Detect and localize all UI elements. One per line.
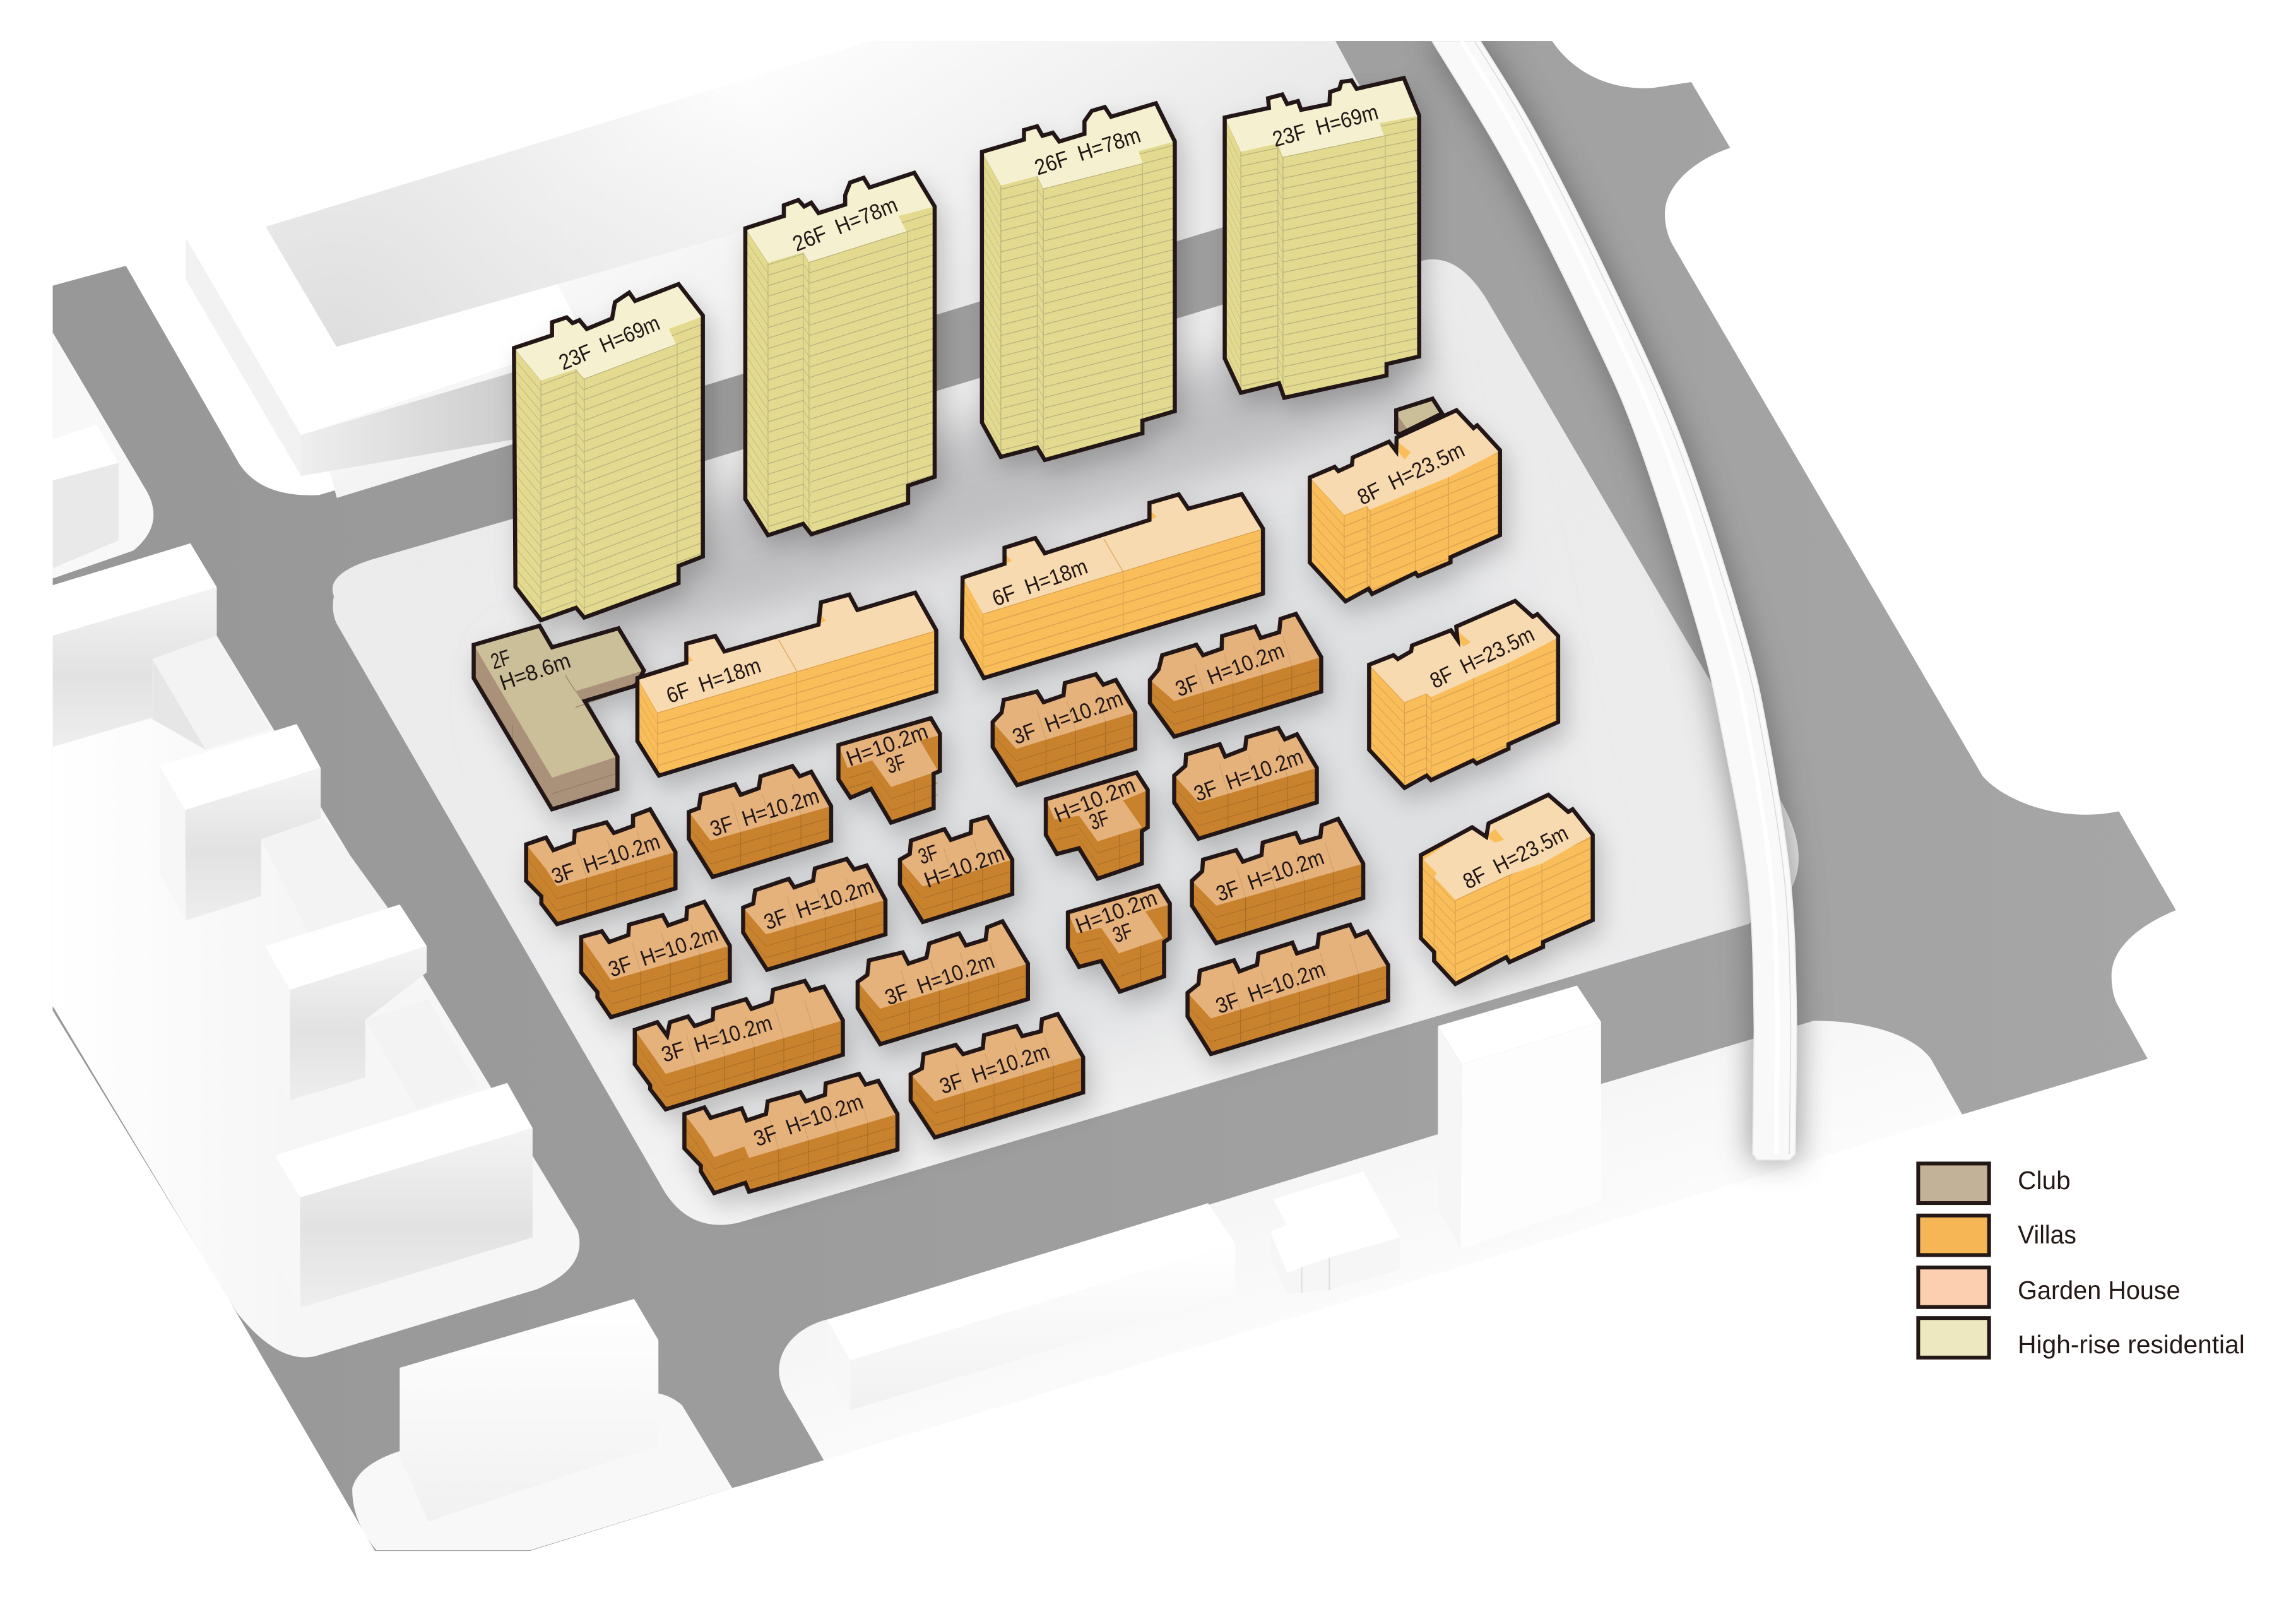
villa 1: 3F H=10.2m [548, 829, 663, 889]
building: garden house 8F north: 8F H=23.5m [1354, 437, 1469, 510]
building: high-rise tower 2 [745, 173, 935, 535]
tall building [1438, 986, 1601, 1249]
building: garden house 6F A: 6F H=18m [663, 653, 764, 708]
building: high-rise tower 3: 26F H=78m [1031, 123, 1144, 180]
villa 6: H=10.2m [921, 841, 1008, 892]
villa 17: T-shaped: H=10.2m [1072, 886, 1161, 939]
villa 3: T-shaped: 3F [883, 749, 909, 779]
villa 2: 3F H=10.2m [707, 783, 822, 841]
building: high-rise tower 1 [514, 284, 703, 620]
building: garden house 8F north [1310, 410, 1500, 602]
legend item: villas [1918, 1216, 2076, 1255]
villa 14: T-shaped: H=10.2m [1051, 773, 1139, 827]
villa 17: T-shaped [1068, 886, 1170, 992]
villa 5: 3F H=10.2m [760, 874, 877, 935]
plot: right-side and bottom white land [530, 0, 2296, 1607]
building: high-rise tower 1: 23F H=69m [555, 311, 663, 375]
villa 9: 3F H=10.2m [937, 1039, 1053, 1099]
building: garden house 8F south: 8F H=23.5m [1459, 821, 1572, 894]
villa 2 [689, 766, 831, 877]
legend item: garden house: Garden House [2018, 1276, 2181, 1305]
plot: bottom-left block [352, 1299, 732, 1550]
legend item: high-rise residential [1918, 1318, 2245, 1359]
villa 6 [900, 817, 1012, 922]
building: high-rise tower 4 [1225, 78, 1419, 398]
white block 4 [275, 1083, 533, 1308]
villa 10 [858, 922, 1028, 1044]
villa 5 [743, 859, 885, 970]
buildings [474, 78, 1593, 1193]
villa 18 [1188, 925, 1388, 1054]
villa 12 [1150, 614, 1321, 737]
white block 2 [160, 724, 388, 937]
villa 15 [1175, 728, 1317, 839]
plot: far-left corner block [53, 333, 153, 579]
building: club: 2F [488, 645, 513, 674]
villa 14: T-shaped: 3F [1086, 805, 1112, 835]
villa 15: 3F H=10.2m [1191, 744, 1306, 807]
building: garden house 6F B [962, 494, 1263, 678]
building: garden house 8F middle [1369, 601, 1558, 788]
building: garden house 6F B: 6F H=18m [989, 554, 1091, 611]
legend item: garden house [1918, 1267, 2181, 1307]
building: club: H=8.6m [497, 648, 574, 696]
villa 7: 3F H=10.2m [659, 1011, 775, 1067]
legend item: villas: Villas [2018, 1220, 2076, 1249]
villa 13 [993, 674, 1135, 785]
villa 18: 3F H=10.2m [1212, 957, 1328, 1019]
villa 6: 3F [915, 840, 941, 869]
building: garden house 8F middle: 8F H=23.5m [1426, 622, 1538, 694]
villa 4: 3F H=10.2m [605, 922, 721, 982]
L-shaped building [186, 227, 586, 476]
building: garden house 6F A [637, 593, 937, 776]
villa 16: 3F H=10.2m [1213, 845, 1327, 906]
building: club [474, 626, 644, 809]
legend item: club: Club [2018, 1166, 2071, 1195]
building: garden house 8F south [1421, 795, 1593, 984]
villa 13: 3F H=10.2m [1009, 686, 1126, 749]
building: high-rise tower 3 [982, 104, 1175, 460]
villa 14: T-shaped [1046, 773, 1148, 879]
tube body [1432, 41, 1797, 1160]
bottom-side white buildings [827, 986, 1601, 1410]
villa 12: 3F H=10.2m [1172, 638, 1287, 702]
villa 3: T-shaped: H=10.2m [843, 719, 932, 771]
villa 8 [684, 1074, 897, 1193]
curved white elevated tube [1432, 41, 1797, 1160]
white block 1 [53, 543, 270, 750]
villa 4 [581, 902, 730, 1017]
small stepped building [1270, 1171, 1400, 1294]
building: small club annex [1396, 399, 1442, 434]
plot: upper-left white block [0, 0, 1405, 498]
plot: central site [333, 259, 1799, 1225]
villa 1 [526, 809, 675, 924]
courtyard shade [265, 41, 937, 347]
villa 10: 3F H=10.2m [882, 949, 998, 1010]
building: high-rise tower 2: 26F H=78m [789, 193, 901, 256]
villa 16 [1192, 819, 1363, 943]
building: high-rise tower 4: 23F H=69m [1270, 100, 1381, 152]
villa 8: 3F H=10.2m [750, 1089, 867, 1151]
long building [827, 1203, 1235, 1410]
villa 17: T-shaped: 3F [1110, 918, 1135, 947]
white block 3 [265, 904, 479, 1110]
legend item: high-rise residential: High-rise residential [2018, 1330, 2245, 1359]
villa 7 [635, 981, 843, 1110]
villa 9 [911, 1014, 1083, 1137]
villa 3: T-shaped [839, 718, 940, 822]
legend [1918, 1163, 2245, 1359]
plot: left residential block [53, 543, 579, 1357]
legend item: club [1918, 1163, 2071, 1203]
